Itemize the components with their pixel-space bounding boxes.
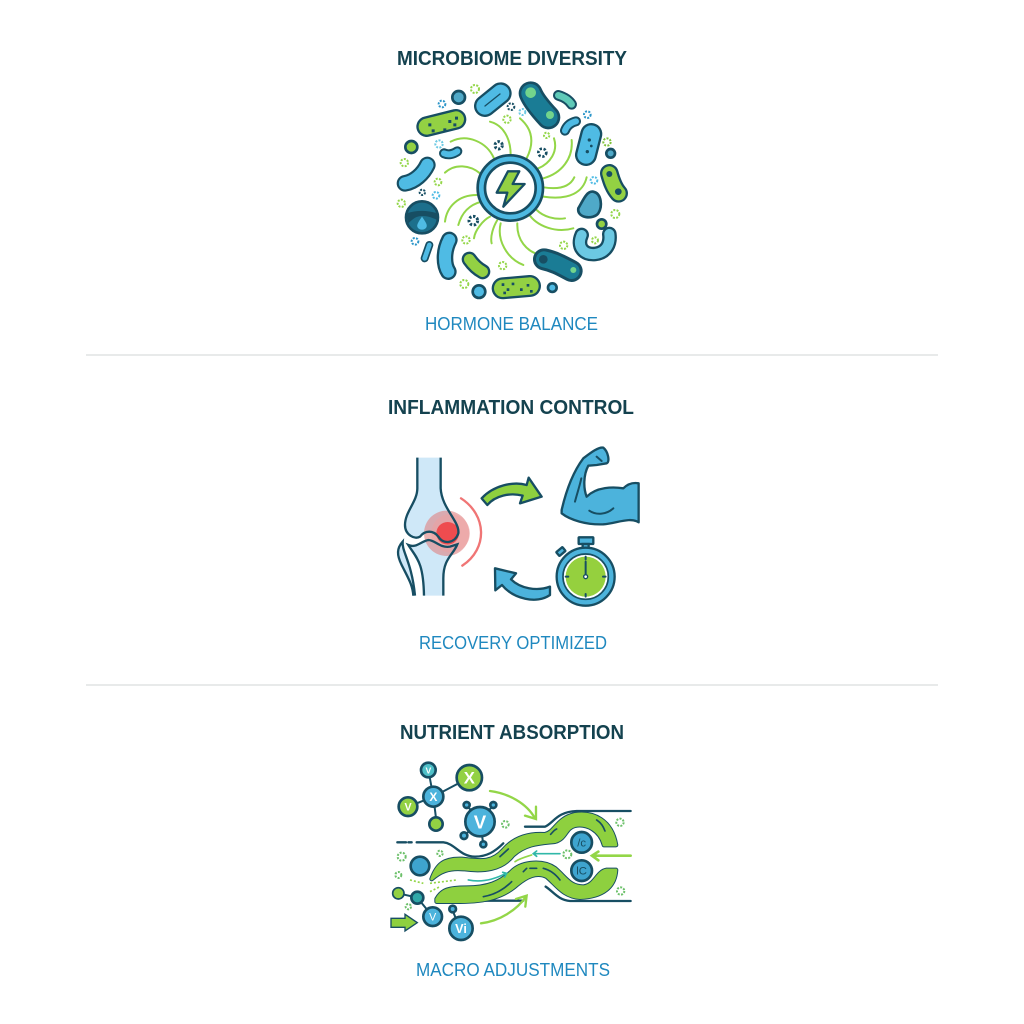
loose circles (405, 91, 615, 298)
icon: stopwatch (556, 537, 615, 606)
heading: nutrient absorption: NUTRIENT ABSORPTION (400, 722, 624, 744)
molecule network top left: X (429, 790, 437, 804)
molecule network top left: X (464, 769, 475, 788)
green lower intestine band (437, 863, 616, 902)
vitamin circles in intestine (571, 832, 592, 881)
heading: inflammation control: INFLAMMATION CONTROL (388, 397, 634, 419)
vitamin circles in intestine: /c (577, 837, 586, 849)
left molecule cluster: V (429, 912, 437, 924)
blue bean bacterium (578, 192, 601, 217)
green rod bacterium upper left (427, 117, 458, 132)
arrow: blue to knee (495, 568, 550, 600)
microbiome illustration (398, 85, 622, 298)
caption: macro adjustments: MACRO ADJUSTMENTS (416, 960, 610, 980)
dark sphere with drop (406, 201, 438, 233)
central energy ring (478, 155, 543, 221)
caption: hormone balance: HORMONE BALANCE (425, 314, 598, 334)
scattered particles (395, 819, 624, 909)
heading: microbiome diversity: MICROBIOME DIVERSITY (397, 48, 628, 70)
inner flow arrows (468, 851, 631, 881)
icon: flexed muscle (562, 448, 639, 524)
blue rod left (405, 165, 427, 183)
left molecule cluster: Vi (455, 922, 467, 936)
knee joint (398, 458, 481, 596)
small blue curved rod (565, 121, 576, 131)
vitamin circles in intestine: lC (576, 866, 587, 878)
green upper intestine band (432, 814, 616, 879)
small chain left (444, 151, 457, 154)
absorption illustration (391, 763, 631, 940)
green curved arrow top (490, 791, 536, 819)
vitamin V molecule (461, 802, 496, 847)
intestine outer lines (397, 811, 631, 901)
energy swirl lines (445, 118, 587, 265)
blue rod right (586, 134, 593, 155)
green bacterium right (606, 171, 622, 195)
molecule network top left (399, 763, 482, 831)
dark bacterium lower right (539, 255, 576, 273)
molecule network top left: V (404, 802, 412, 814)
panel: inflammation control (388, 397, 639, 653)
vitamin V molecule: V (474, 811, 487, 832)
green input arrow (391, 914, 417, 931)
green rod bottom (502, 283, 533, 294)
green curved arrow bottom (481, 896, 527, 923)
left molecule cluster (393, 857, 473, 940)
intestine dash marks (483, 820, 605, 897)
teal capsule bacterium (558, 95, 572, 104)
blue rod lower left (445, 240, 449, 272)
small blue chain (425, 245, 429, 258)
dark dumbbell bacterium top (525, 87, 554, 119)
molecule network top left: V (425, 765, 431, 775)
dotted microbes (398, 85, 619, 288)
green bean lower middle (469, 259, 483, 272)
panel: nutrient absorption (391, 722, 631, 980)
blue rod bacterium top (485, 93, 501, 106)
arrow: green to muscle (482, 478, 542, 505)
recovery cycle illustration (398, 448, 639, 606)
caption: recovery optimized: RECOVERY OPTIMIZED (419, 633, 607, 653)
panel: microbiome diversity (397, 48, 628, 334)
blue curled bacterium (580, 234, 610, 254)
dark star microbes (469, 142, 546, 225)
